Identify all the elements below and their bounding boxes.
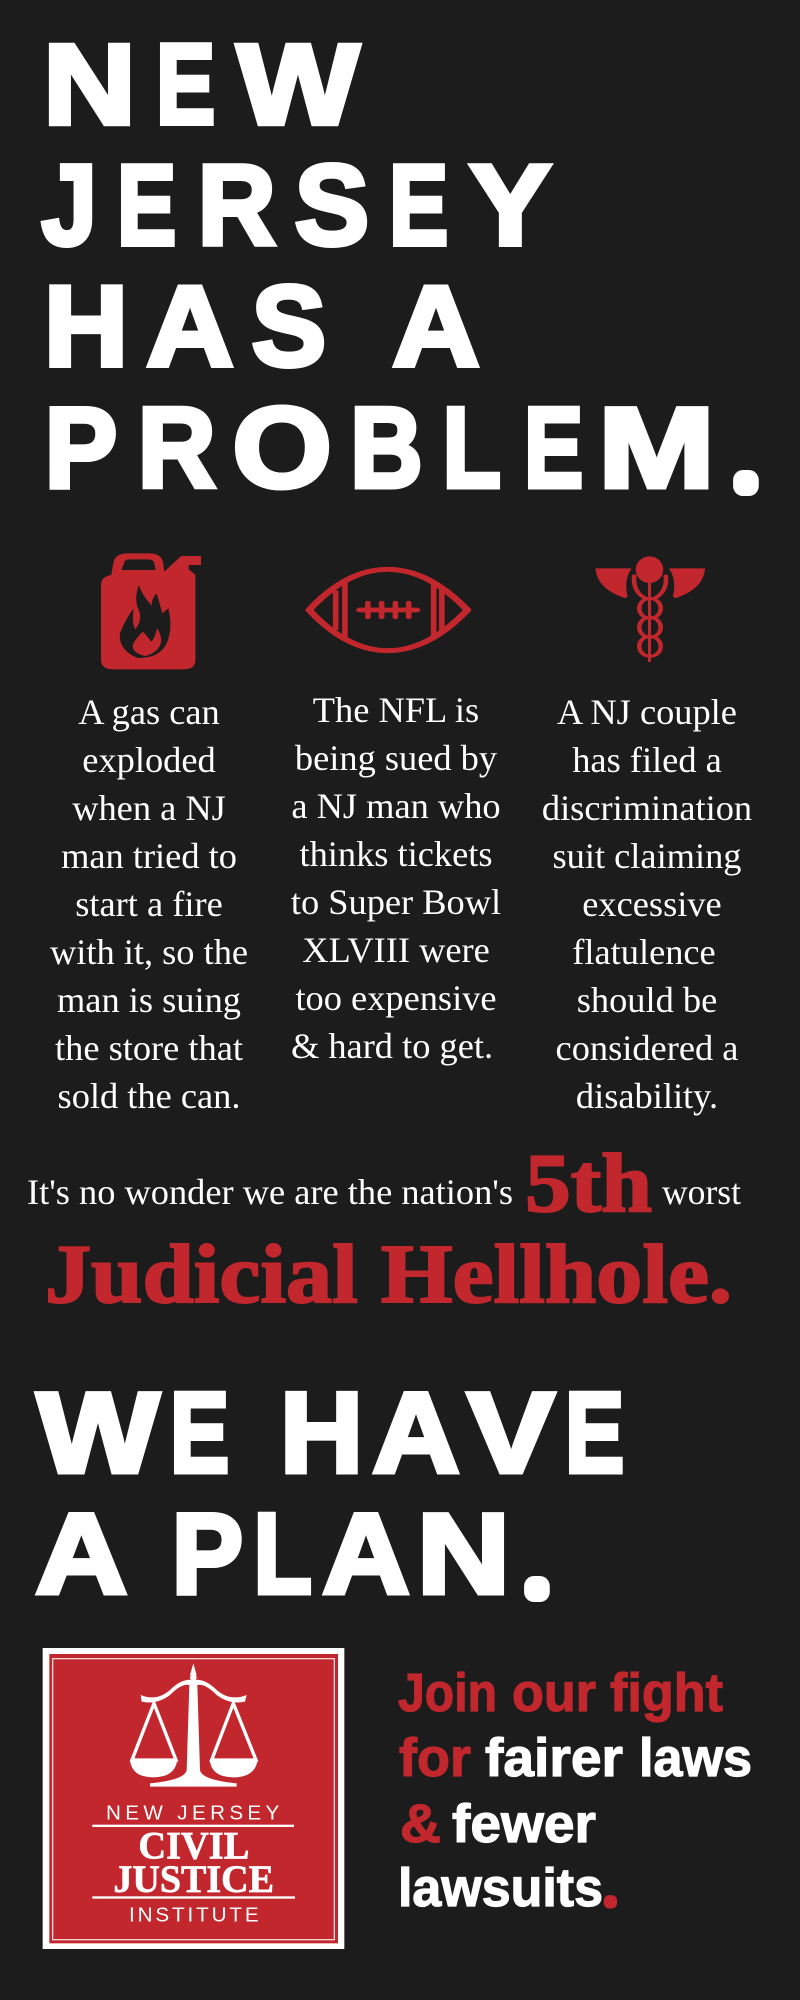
text: flatulence suit story: discrimination xyxy=(542,788,752,828)
call to action: join our fight: our xyxy=(512,1663,596,1723)
callout: 5th worst judicial hellhole: worst xyxy=(662,1172,741,1212)
heading: we have a plan: E xyxy=(565,1370,624,1497)
callout: 5th worst judicial hellhole: 5th xyxy=(525,1137,652,1230)
heading: we have a plan: W xyxy=(37,1370,160,1497)
title: New Jersey has a problem: N xyxy=(43,22,136,149)
callout: 5th worst judicial hellhole: Judicial Hellhole. xyxy=(45,1228,732,1321)
title: New Jersey has a problem: . xyxy=(740,451,752,495)
title: New Jersey has a problem: Y xyxy=(470,143,551,270)
text: NFL story: being sued by xyxy=(295,738,498,778)
text: NFL story: XLVIII were xyxy=(302,930,490,970)
call to action: join our fight: fewer xyxy=(452,1794,596,1854)
call to action: join our fight: lawsuits xyxy=(398,1858,603,1918)
call to action: join our fight: . xyxy=(608,1890,613,1907)
text: NFL story: & hard to get. xyxy=(291,1026,493,1066)
heading: we have a plan: E xyxy=(170,1370,229,1497)
heading: we have a plan xyxy=(36,1370,624,1618)
logo: wordmark: JUSTICE xyxy=(113,1857,274,1901)
heading: we have a plan: A xyxy=(322,1491,410,1618)
text: gas can story: when a NJ xyxy=(72,788,226,828)
text: NFL story: thinks tickets xyxy=(299,834,493,874)
icon: caduceus xyxy=(595,556,705,662)
text: gas can story: start a fire xyxy=(75,884,223,924)
call to action: join our fight: & xyxy=(400,1794,441,1854)
logo: New Jersey Civil Justice Institute xyxy=(43,1648,344,1949)
logo: wordmark: CIVIL xyxy=(138,1823,249,1867)
text: flatulence suit story: suit claiming xyxy=(552,836,742,876)
text: NFL story: too expensive xyxy=(295,978,497,1018)
title: New Jersey has a problem: M xyxy=(598,385,715,512)
call to action: join our fight: fairer xyxy=(485,1728,623,1788)
title: New Jersey has a problem: H xyxy=(44,264,128,391)
heading: we have a plan: V xyxy=(468,1370,554,1497)
heading: we have a plan: N xyxy=(417,1491,510,1618)
title: New Jersey has a problem: P xyxy=(45,385,117,512)
text: flatulence suit story: flatulence xyxy=(572,932,716,972)
logo: wordmark xyxy=(92,1801,295,1927)
title: New Jersey has a problem: A xyxy=(146,264,234,391)
callout: 5th worst judicial hellhole xyxy=(27,1137,741,1321)
call to action: join our fight: for xyxy=(399,1728,471,1788)
text: NFL story: to Super Bowl xyxy=(291,882,501,922)
text: flatulence suit story: has filed a xyxy=(572,740,722,780)
text: gas can story: the store that xyxy=(55,1028,243,1068)
text: gas can story: man is suing xyxy=(57,980,241,1020)
title: New Jersey has a problem: S xyxy=(252,264,326,391)
title: New Jersey has a problem: W xyxy=(237,22,360,149)
call to action: join our fight: laws xyxy=(639,1728,752,1788)
text: gas can story: with it, so the xyxy=(50,932,248,972)
icon: gas can with flame xyxy=(101,553,201,669)
text: gas can story: exploded xyxy=(82,740,216,780)
title: New Jersey has a problem: A xyxy=(392,264,480,391)
text: gas can story: sold the can. xyxy=(58,1076,240,1116)
title: New Jersey has a problem: E xyxy=(117,143,176,270)
title: New Jersey has a problem: E xyxy=(389,143,448,270)
text: gas can story: man tried to xyxy=(61,836,237,876)
text: flatulence suit story xyxy=(542,692,752,1116)
text: flatulence suit story: excessive xyxy=(582,884,722,924)
heading: we have a plan: A xyxy=(372,1370,460,1497)
title: New Jersey has a problem: L xyxy=(442,385,501,512)
text: NFL story: a NJ man who xyxy=(291,786,501,826)
heading: we have a plan: L xyxy=(254,1491,312,1618)
callout: 5th worst judicial hellhole: It's no wonder we are the nation's xyxy=(27,1172,513,1212)
title: New Jersey has a problem: S xyxy=(295,143,369,270)
title: New Jersey has a problem: R xyxy=(138,385,216,512)
title: New Jersey has a problem: B xyxy=(350,385,423,512)
call to action: join our fight: fight xyxy=(610,1663,723,1723)
text: flatulence suit story: A NJ couple xyxy=(557,692,737,732)
text: flatulence suit story: disability. xyxy=(576,1076,718,1116)
text: flatulence suit story: considered a xyxy=(556,1028,738,1068)
heading: we have a plan: H xyxy=(280,1370,363,1497)
text: gas can story xyxy=(50,692,248,1116)
text: NFL story xyxy=(291,690,501,1066)
title: New Jersey has a problem: O xyxy=(232,385,332,512)
heading: we have a plan: A xyxy=(36,1491,125,1618)
logo: scales of justice xyxy=(130,1663,258,1787)
call to action: join our fight xyxy=(398,1663,752,1918)
heading: we have a plan: P xyxy=(172,1491,243,1618)
text: NFL story: The NFL is xyxy=(313,690,479,730)
title: New Jersey has a problem: R xyxy=(198,143,276,270)
logo: wordmark: NEW JERSEY xyxy=(106,1801,280,1824)
title: New Jersey has a problem: E xyxy=(156,22,215,149)
title: New Jersey has a problem xyxy=(42,22,752,512)
icon: football xyxy=(309,569,467,651)
title: New Jersey has a problem: E xyxy=(524,385,583,512)
heading: we have a plan: . xyxy=(531,1557,543,1601)
text: flatulence suit story: should be xyxy=(577,980,717,1020)
call to action: join our fight: Join xyxy=(398,1663,497,1723)
title: New Jersey has a problem: J xyxy=(42,143,97,270)
logo: wordmark: INSTITUTE xyxy=(129,1904,259,1927)
text: gas can story: A gas can xyxy=(78,692,220,732)
